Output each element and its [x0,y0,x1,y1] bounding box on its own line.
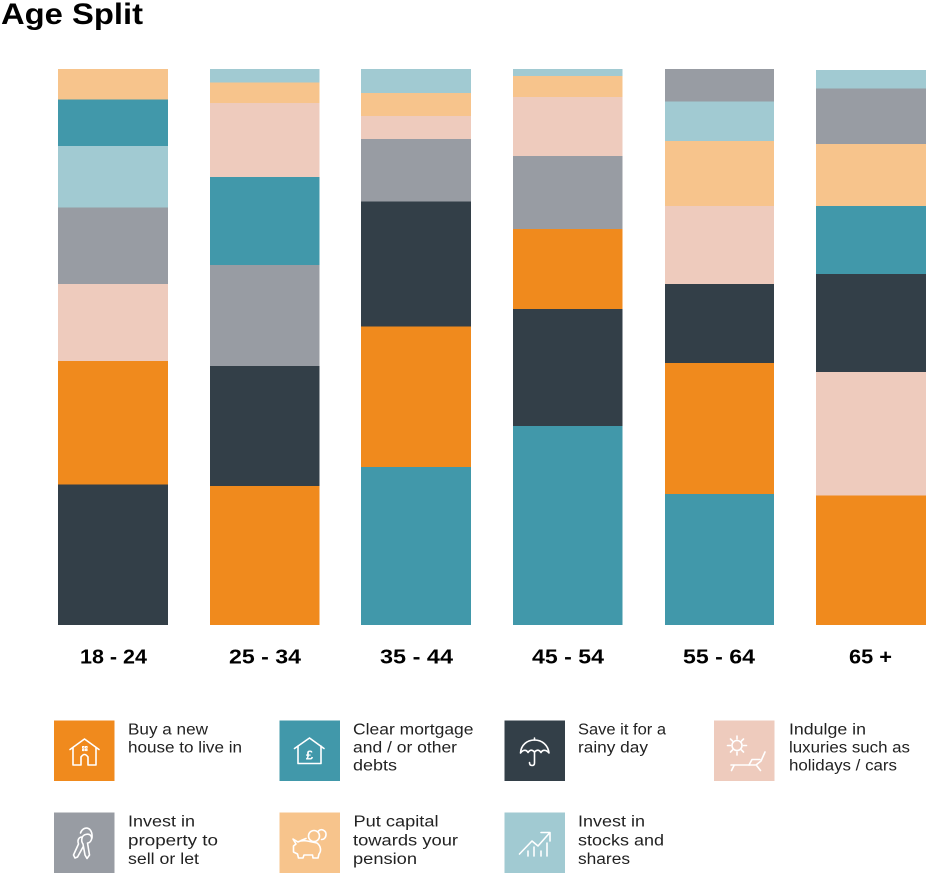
legend item: pension [280,812,458,873]
legend item: save for a rainy day: rainy day [578,740,648,756]
legend item: pension: pension [353,851,417,868]
bar: 25 - 34 [210,69,320,625]
legend item: clear mortgage: debts [353,758,397,774]
icon: house [70,739,99,765]
bar: 18 - 24 [58,69,168,625]
icon: house with pound sign [294,738,324,764]
icon: piggy bank with coin [293,830,326,858]
legend [54,720,910,873]
legend item: clear mortgage: and / or other [353,740,457,756]
legend item: save for a rainy day: Save it for a [578,722,666,738]
x-axis labels: 35 - 44 [380,646,454,668]
x-axis labels: 55 - 64 [683,646,756,668]
legend item: clear mortgage [280,720,474,781]
icon: house with pound sign: £ [306,748,314,762]
icon: rising chart [520,832,550,856]
legend item: invest in property: Invest in [128,814,195,830]
legend item: invest in property: property to [128,832,218,850]
bar: 35 - 44 [361,69,471,625]
x-axis labels: 45 - 54 [532,646,605,668]
bar: 65 + [816,70,926,625]
legend item: buy a new house: Buy a new [128,722,209,738]
legend item: buy a new house: house to live in [128,740,242,756]
x-axis labels: 18 - 24 [80,646,148,668]
legend item: indulge in luxuries: luxuries such as [789,740,910,756]
legend item: invest in stocks [504,812,664,873]
stacked bar chart [58,69,926,625]
icon: umbrella [520,738,549,766]
x-axis labels: 65 + [849,646,892,668]
legend item: invest in property: sell or let [128,851,200,868]
legend item: indulge in luxuries [714,720,910,781]
legend item: invest in stocks: shares [578,851,630,868]
legend item: indulge in luxuries: Indulge in [789,722,866,738]
legend item: buy a new house [54,720,242,781]
legend item: invest in stocks: Invest in [578,814,645,830]
x-axis labels: 25 - 34 [229,646,302,668]
legend item: indulge in luxuries: holidays / cars [789,758,897,774]
legend item: clear mortgage: Clear mortgage [353,722,474,738]
legend item: invest in stocks: stocks and [578,832,664,850]
legend item: invest in property [54,812,218,873]
legend item: save for a rainy day [504,720,666,781]
bar: 55 - 64 [665,69,774,625]
legend item: pension: towards your [353,832,458,850]
legend item: pension: Put capital [354,814,438,830]
bar: 45 - 54 [513,69,622,625]
icon: keys [74,828,92,858]
icon: sun and lounger [728,736,765,770]
x-axis labels [80,646,892,668]
